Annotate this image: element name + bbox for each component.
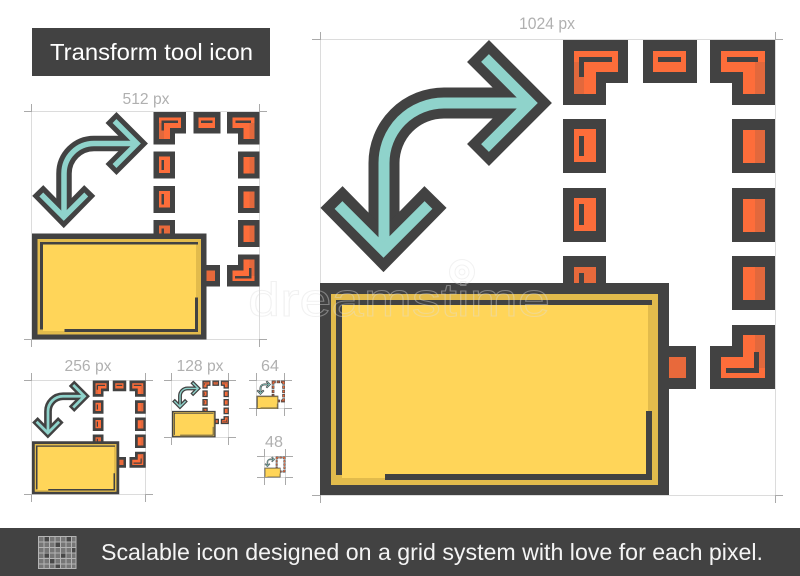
dashed selection: top-middle handle <box>643 40 697 83</box>
double curved arrow <box>332 51 530 250</box>
dashed selection: top-right corner handle <box>710 40 775 105</box>
watermark <box>248 260 550 326</box>
size guide frames <box>24 32 783 503</box>
icon: transform tool 1024 px <box>320 40 775 495</box>
icon: transform tool 64 px <box>256 380 285 409</box>
icon: transform tool 48 px <box>264 456 285 477</box>
icon: transform tool 512 px <box>32 112 260 340</box>
label: 128 px: 128 px <box>176 358 224 375</box>
footer text: Scalable icon designed on a grid system with love for each pixel. <box>101 539 763 565</box>
label: 48: 48 <box>265 434 283 451</box>
dashed selection: bottom-right corner handle <box>710 325 775 389</box>
footer bar <box>0 528 800 576</box>
label: 64: 64 <box>261 358 279 375</box>
label: 1024 px: 1024 px <box>519 15 576 33</box>
icon: transform tool 128 px <box>172 380 229 437</box>
icon: pixel grid <box>38 536 76 569</box>
dashed selection: right handles <box>732 119 775 310</box>
title: Transform tool icon <box>50 39 253 65</box>
title <box>32 28 270 76</box>
dashed selection: left handles <box>563 119 606 296</box>
watermark: dreamstime <box>248 273 550 326</box>
dashed selection: bottom-middle handle <box>660 346 696 389</box>
label: 512 px: 512 px <box>122 91 170 108</box>
icon: transform tool 256 px <box>32 380 146 494</box>
yellow rectangle <box>320 283 669 495</box>
label: 256 px: 256 px <box>64 358 112 375</box>
dashed selection: top-left corner handle <box>563 40 628 105</box>
